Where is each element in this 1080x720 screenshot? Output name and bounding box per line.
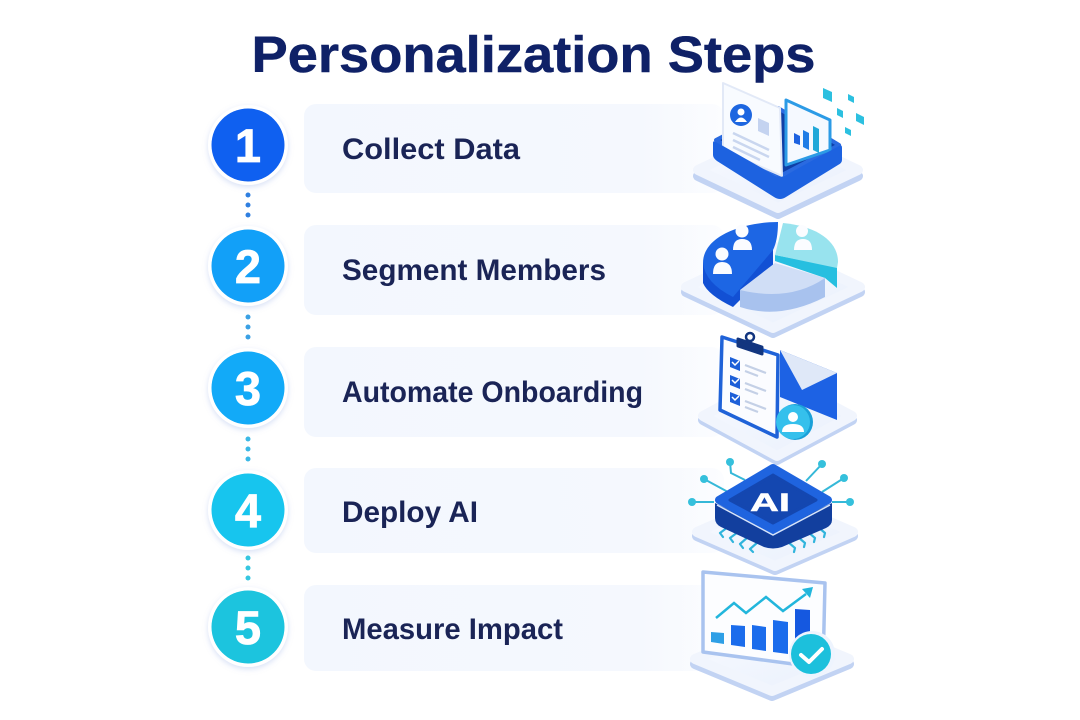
- chip pins: [720, 527, 825, 552]
- step 5 badge: 5: [235, 601, 261, 654]
- step 1 badge: [208, 105, 288, 185]
- step 4 badge: [208, 470, 288, 550]
- step 3 label: Automate Onboarding: [342, 376, 643, 409]
- document card: [723, 83, 782, 176]
- step 3 row: [208, 347, 724, 437]
- step 5 badge: [208, 587, 288, 667]
- icon: AI chip: [688, 458, 854, 570]
- clipboard: [720, 337, 778, 437]
- people figures: [713, 224, 812, 274]
- step 2 badge: [208, 226, 288, 306]
- chart board: [703, 572, 825, 668]
- step 2 card: [304, 225, 724, 315]
- tray front wall: [713, 141, 842, 199]
- connector dots 4 to 5: [246, 556, 250, 580]
- envelope: [780, 350, 837, 420]
- step 4 label: Deploy AI: [342, 496, 478, 529]
- step 1 card: [304, 104, 724, 193]
- circuit traces: [692, 462, 850, 502]
- bars: [711, 632, 724, 644]
- teal segment: [775, 255, 837, 288]
- step 4 card: [304, 468, 724, 553]
- connector dots 3 to 4: [246, 436, 250, 462]
- icon: AI chip: AI: [750, 489, 790, 517]
- chip body: [715, 503, 832, 548]
- chart card: [786, 100, 830, 165]
- step 2 row: [208, 225, 724, 315]
- trend arrow: [716, 594, 806, 618]
- icon: data collection tray: [698, 83, 864, 214]
- step 2 label: Segment Members: [342, 254, 606, 287]
- step 1 row: [208, 104, 724, 193]
- check badge: [789, 631, 835, 677]
- icon: clipboard and envelope: [703, 333, 852, 460]
- connector dots 1 to 2: [246, 192, 250, 218]
- step 5 label: Measure Impact: [342, 613, 563, 646]
- step 5 card: [304, 585, 724, 671]
- avatar token: [777, 404, 813, 440]
- step 5 row: [208, 585, 724, 671]
- light segment: [740, 278, 825, 312]
- step 1 label: Collect Data: [342, 133, 520, 166]
- step 3 badge: 3: [235, 362, 261, 415]
- step 1 badge: 1: [235, 119, 261, 172]
- step 4 badge: 4: [235, 484, 261, 537]
- icon: impact dashboard: [695, 572, 849, 696]
- connector dots 2 to 3: [246, 314, 250, 340]
- blue segment: [703, 247, 773, 307]
- step 3 card: [304, 347, 724, 437]
- step 3 badge: [208, 348, 288, 428]
- step 2 badge: 2: [235, 240, 261, 293]
- icon: segmented pie chart: [686, 222, 860, 333]
- step 4 row: [208, 468, 724, 553]
- tray interior: [716, 108, 839, 176]
- data squares: [823, 88, 864, 136]
- title: Personalization Steps: [252, 26, 816, 83]
